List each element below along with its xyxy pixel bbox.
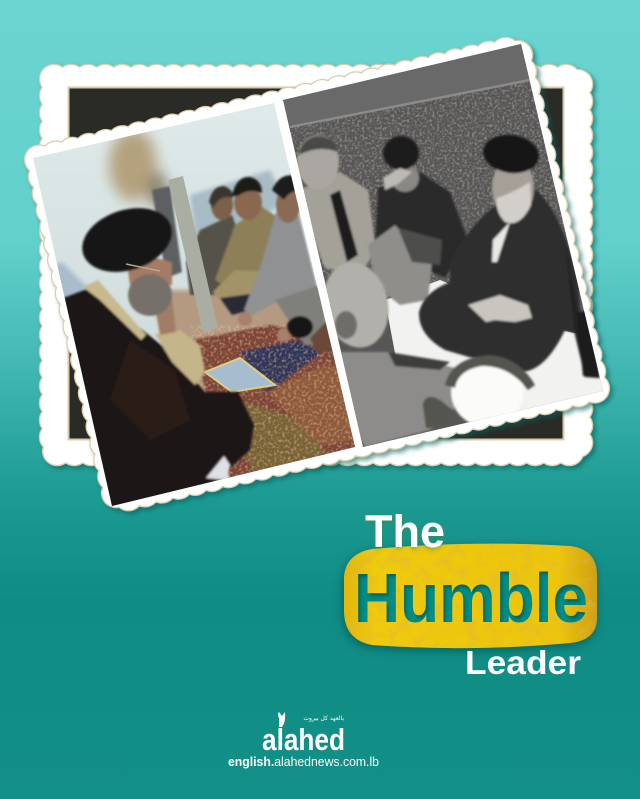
photo: black and white seated group <box>283 44 603 447</box>
floor <box>385 280 610 420</box>
logo: alahed <box>262 712 345 757</box>
background figure legs <box>152 186 182 278</box>
title banner: yellow plate with Humble <box>340 540 600 652</box>
column <box>168 176 218 333</box>
foreground bald head <box>423 355 535 428</box>
blurred figure <box>109 129 168 208</box>
title word: The: The <box>365 506 445 557</box>
speckled wall <box>275 80 595 310</box>
photo: leader seated on carpet with officers <box>33 103 355 506</box>
panel: front scalloped card holding both photos <box>39 49 595 499</box>
website url: english.alahednews.com.lb <box>228 754 379 769</box>
elder with white beard <box>419 131 600 378</box>
turban <box>80 206 173 274</box>
foreground striped jacket <box>341 351 456 446</box>
logo: alahed: alahed <box>262 722 345 757</box>
man with hand on forehead <box>368 136 468 305</box>
carpets <box>192 324 355 478</box>
panel: back scalloped photo card <box>54 79 578 451</box>
title word: Leader: Leader <box>465 644 581 681</box>
officers <box>186 175 338 352</box>
foreground curly hair head <box>325 262 390 349</box>
man in light jacket <box>297 135 376 275</box>
icon: leaf <box>278 712 285 727</box>
glasses <box>126 264 160 271</box>
wall band <box>283 44 530 126</box>
logo: alahed: بالعهد كل بيروت <box>303 715 344 722</box>
seated leader robe <box>64 257 256 506</box>
paper map on carpet <box>205 358 275 392</box>
title banner: yellow plate with Humble: Humble <box>354 559 588 637</box>
